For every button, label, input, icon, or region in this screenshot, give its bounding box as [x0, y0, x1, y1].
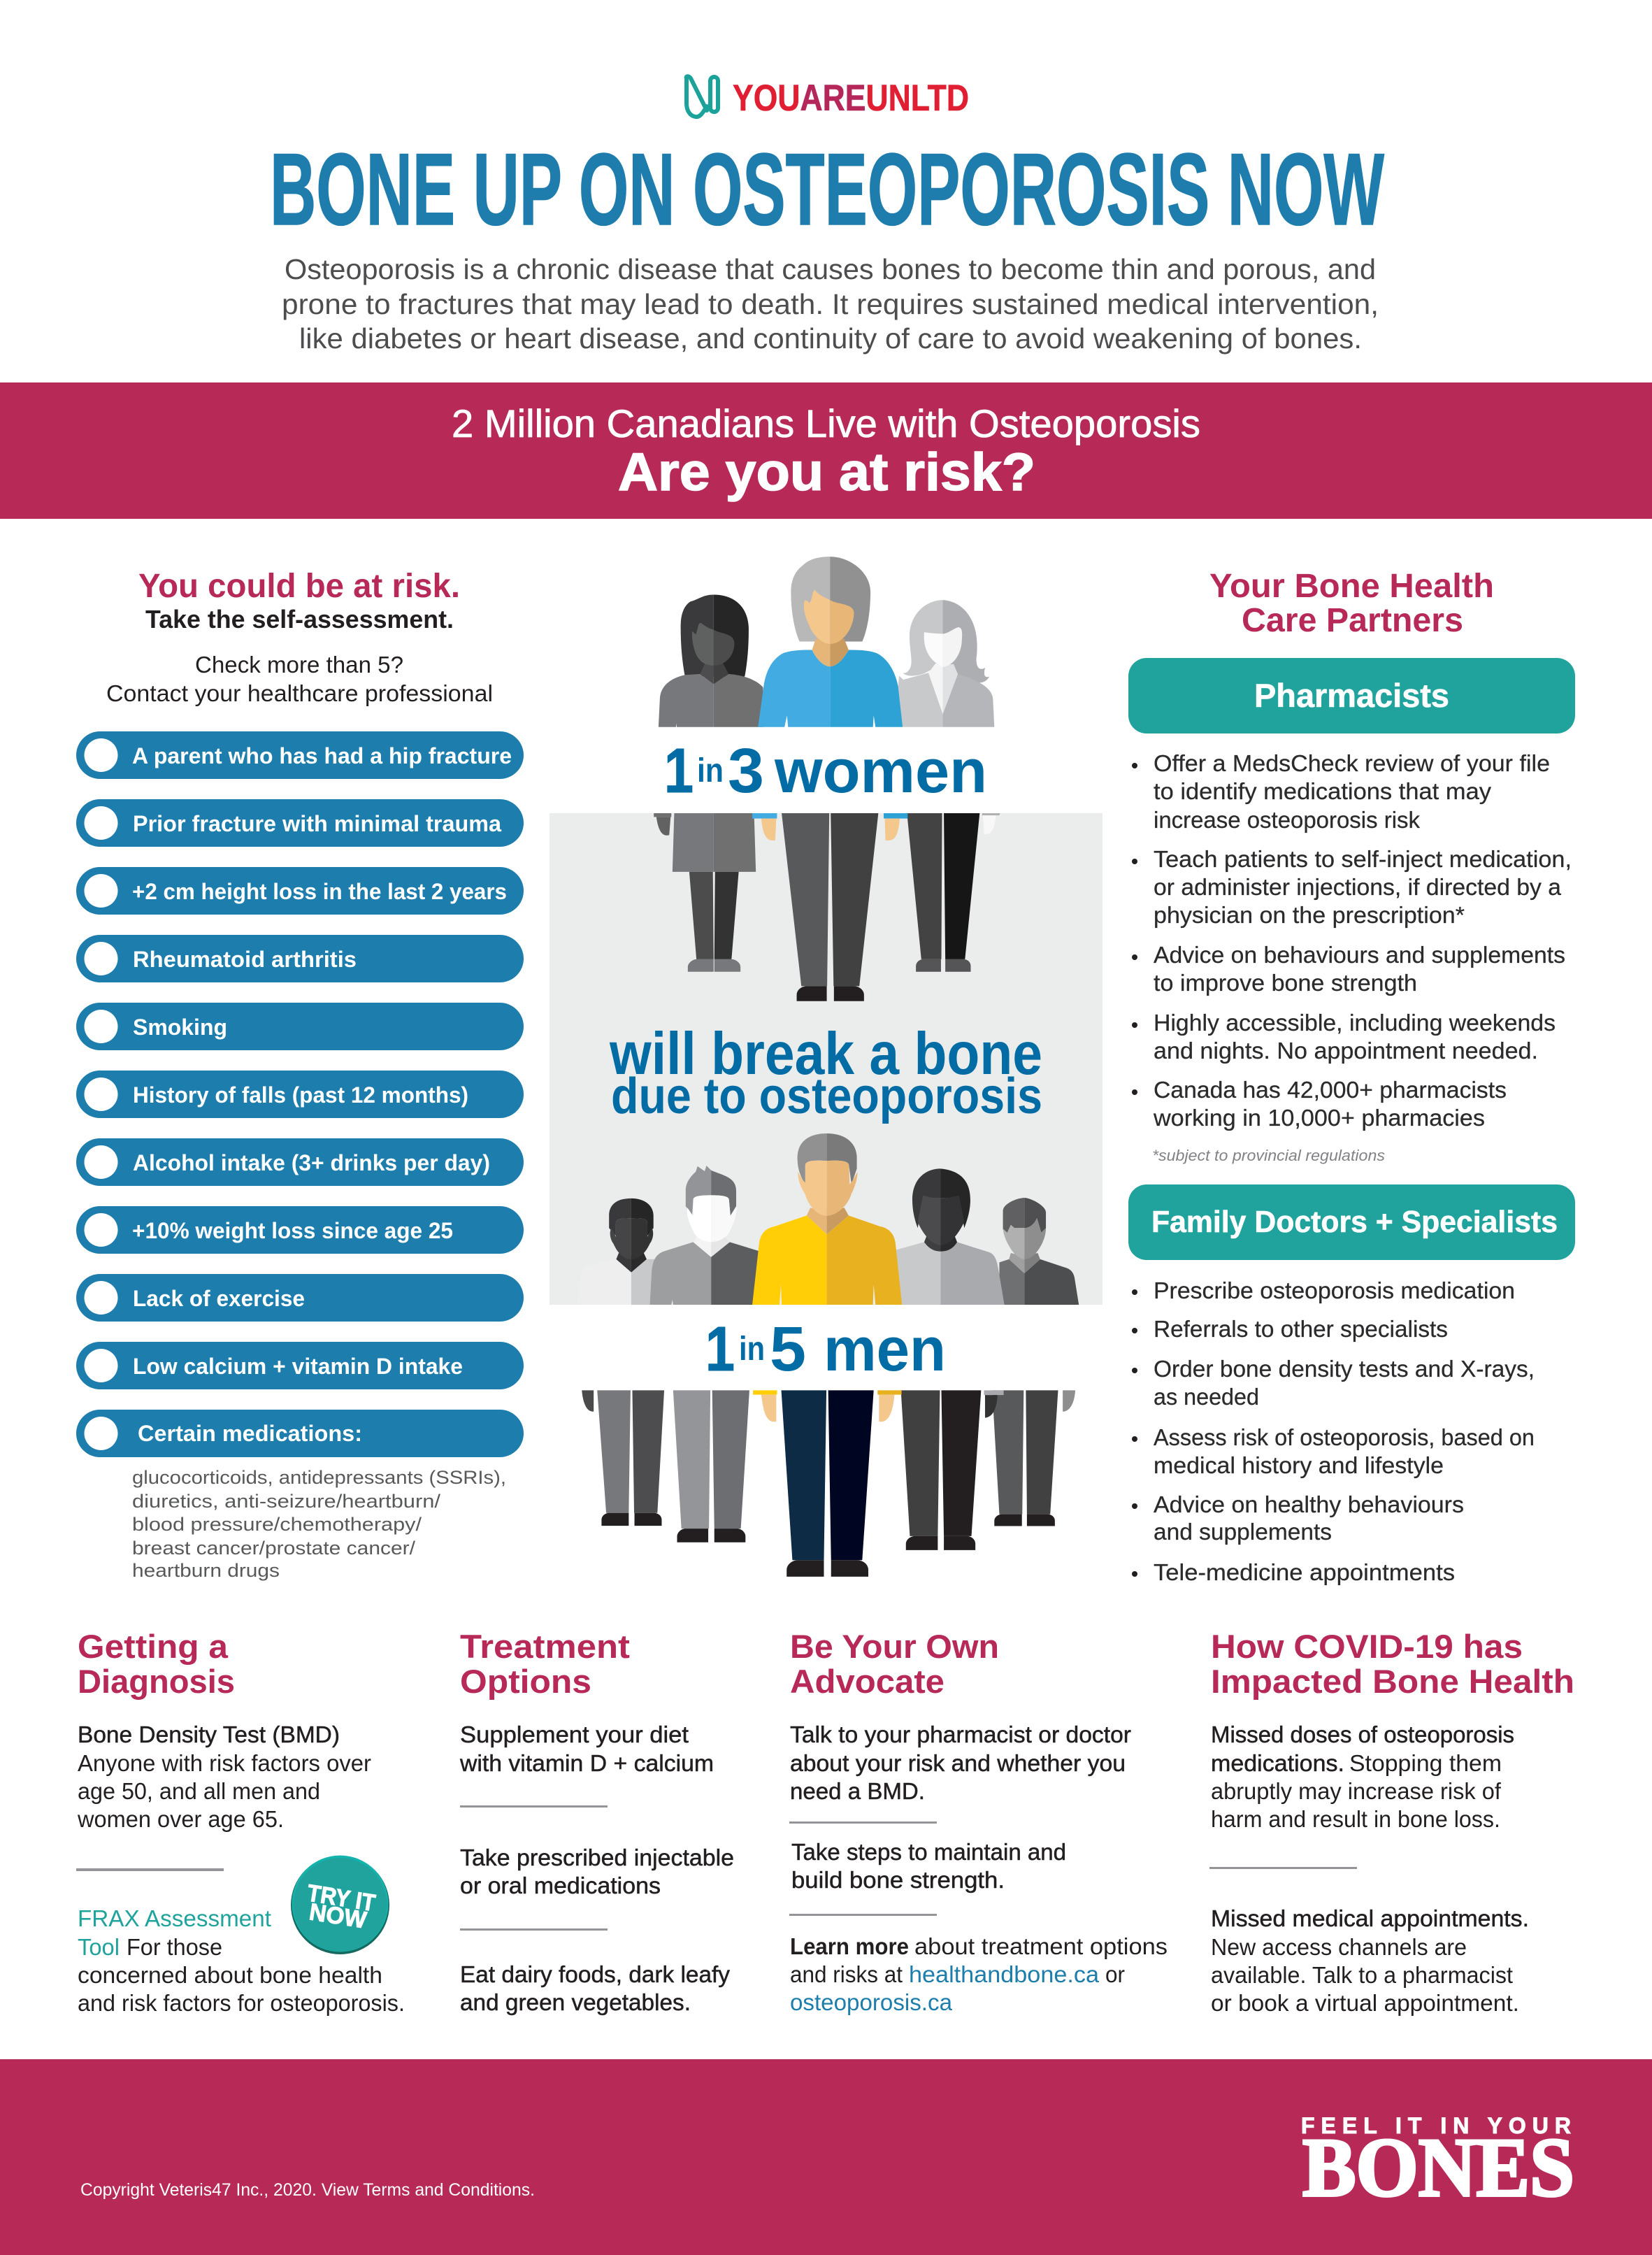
text: medications: Take prescribed injectable	[460, 1845, 734, 1870]
pill: medications	[76, 1410, 524, 1457]
figure: far-left man	[577, 1198, 664, 1526]
heading	[790, 1628, 999, 1700]
pill: rheumatoid arthritis: Rheumatoid arthritis	[133, 947, 357, 972]
list: family doctors: Tele-medicine appointments	[1154, 1559, 1455, 1585]
text: supplements: Supplement your diet	[460, 1721, 689, 1747]
text: take steps	[791, 1839, 1066, 1893]
text: missed doses: Missed doses of osteoporosis	[1211, 1721, 1514, 1747]
medications list: breast cancer/prostate cancer/	[132, 1538, 416, 1559]
list: pharmacists: Canada has 42,000+ pharmacists	[1154, 1077, 1507, 1103]
text: missed appointments	[1211, 1905, 1529, 2016]
text: take steps: build bone strength.	[791, 1867, 1005, 1893]
statistic: 1 in 3 women: 3	[728, 736, 764, 806]
heading: Be Your Own	[790, 1628, 999, 1665]
pill: calcium: Low calcium + vitamin D intake	[133, 1354, 463, 1379]
grey background panel	[550, 813, 1102, 1305]
statistic: 1 in 5 men: 1	[705, 1315, 735, 1384]
pill: exercise	[76, 1274, 524, 1322]
intro text	[282, 253, 1379, 355]
instruction text	[106, 652, 493, 706]
medications list: blood pressure/chemotherapy/	[132, 1514, 422, 1535]
list: pharmacists: to identify medications that may	[1154, 778, 1492, 804]
footnote: *subject to provincial regulations	[1152, 1147, 1385, 1164]
list: pharmacists: to improve bone strength	[1154, 970, 1417, 996]
statistic: 1 in 5 men: 5	[770, 1315, 806, 1384]
list: pharmacists	[1132, 750, 1572, 1131]
instruction text: Check more than 5?	[195, 652, 403, 678]
subheading: Take the self-assessment.	[145, 605, 454, 633]
text: missed appointments: or book a virtual appointment.	[1211, 1990, 1519, 2016]
panel: getting a diagnosis	[76, 1628, 405, 2016]
text: missed doses: harm and result in bone loss.	[1211, 1806, 1500, 1832]
pill: smoking	[76, 1003, 524, 1050]
footer band	[0, 2059, 1652, 2255]
figure: fourth man	[896, 1168, 1005, 1550]
text: medications	[460, 1845, 734, 1898]
text: supplements: with vitamin D + calcium	[459, 1750, 714, 1776]
text: missed doses: abruptly may increase risk of	[1211, 1778, 1502, 1804]
text: will break a bone: due to osteoporosis	[611, 1068, 1042, 1124]
heading	[460, 1628, 630, 1700]
statistic: 1 in 3 women: in	[697, 752, 724, 789]
list: family doctors: medical history and lifestyle	[1154, 1452, 1444, 1478]
list: pharmacists: physician on the prescription*	[1154, 902, 1465, 928]
text: supplements	[459, 1721, 714, 1776]
statistic: 1 in 5 men	[705, 1315, 946, 1384]
pill: hip fracture	[76, 731, 524, 779]
checklist pills	[76, 731, 524, 1457]
icon: try it now button: TRY IT	[306, 1880, 378, 1917]
list: pharmacists: working in 10,000+ pharmacies	[1153, 1105, 1485, 1131]
text: medications: or oral medications	[460, 1873, 661, 1898]
illustration: five men	[577, 1133, 1079, 1577]
list: pharmacists: increase osteoporosis risk	[1154, 807, 1420, 833]
heading: Advocate	[790, 1663, 944, 1700]
intro text: Osteoporosis is a chronic disease that causes bones to become thin and porous, and	[285, 253, 1376, 285]
text: learn more: and risks at	[790, 1961, 903, 1987]
banner heading: Are you at risk?	[618, 443, 1035, 502]
list: family doctors: Advice on healthy behaviours	[1154, 1491, 1464, 1517]
text: bone density test: Anyone with risk factors over	[78, 1750, 371, 1776]
header: family doctors and specialists: Family Doctors + Specialists	[1151, 1205, 1558, 1239]
text: bone density test	[77, 1721, 371, 1832]
text: will break a bone	[609, 1021, 1042, 1124]
medications list: diuretics, anti-seizure/heartburn/	[132, 1491, 441, 1512]
intro text: like diabetes or heart disease, and continuity of care to avoid weakening of bones.	[299, 322, 1362, 355]
text: FRAX tool: and risk factors for osteoporosis.	[78, 1990, 405, 2016]
panel: centre statistics	[550, 557, 1102, 1577]
text: learn more: osteoporosis.ca	[790, 1989, 953, 2015]
panel: self-assessment	[76, 568, 524, 1581]
intro text: prone to fractures that may lead to death. It requires sustained medical intervention,	[282, 288, 1379, 320]
icon: logo mark	[687, 76, 718, 117]
pill: hip fracture: A parent who has had a hip fracture	[132, 743, 512, 768]
text: diet	[460, 1961, 731, 2015]
text: will break a bone: will break a bone	[609, 1021, 1042, 1087]
text: bone density test: Bone Density Test (BMD)	[78, 1721, 340, 1747]
heading	[78, 1628, 235, 1700]
text: learn more: Learn more	[790, 1933, 909, 1959]
text: FRAX tool	[78, 1905, 405, 2016]
statistic: 1 in 3 women	[664, 736, 987, 806]
statistic: 1 in 3 women: women	[774, 736, 987, 806]
text: learn more: healthandbone.ca	[909, 1961, 1100, 1987]
panel: bone health care partners	[1128, 568, 1575, 1585]
pill: exercise: Lack of exercise	[133, 1286, 305, 1311]
list: family doctors	[1132, 1277, 1535, 1585]
pill: calcium	[76, 1342, 524, 1389]
list: family doctors: Referrals to other specialists	[1154, 1316, 1448, 1342]
text: missed appointments: Missed medical appointments.	[1211, 1905, 1529, 1931]
pill: alcohol: Alcohol intake (3+ drinks per day)	[133, 1150, 490, 1175]
figure: left woman	[654, 595, 763, 972]
pill: falls	[76, 1071, 524, 1118]
list: pharmacists: Teach patients to self-inject medication,	[1154, 846, 1572, 872]
text: learn more: or	[1105, 1961, 1125, 1987]
header: family doctors and specialists	[1128, 1184, 1575, 1260]
pill: medications: Certain medications:	[138, 1421, 362, 1446]
pill: falls: History of falls (past 12 months)	[133, 1082, 468, 1108]
pill: smoking: Smoking	[133, 1015, 227, 1040]
heading: Getting a	[78, 1628, 229, 1665]
logo: You Are Unltd	[687, 76, 969, 119]
statistic: 1 in 3 women: 1	[664, 736, 694, 806]
text: bone density test: women over age 65.	[77, 1806, 284, 1832]
text: FRAX tool: concerned about bone health	[78, 1962, 382, 1988]
header: pharmacists	[1128, 658, 1575, 733]
list: family doctors: and supplements	[1154, 1519, 1332, 1545]
pill: rheumatoid arthritis	[76, 935, 524, 982]
text: talk to pharmacist: about your risk and whether you	[790, 1750, 1126, 1776]
list: pharmacists: Advice on behaviours and supplements	[1154, 942, 1565, 968]
pill: prior fracture	[76, 799, 524, 847]
heading: Options	[460, 1663, 591, 1700]
icon: try it now button: NOW	[308, 1898, 369, 1934]
text: take steps: Take steps to maintain and	[791, 1839, 1066, 1865]
text: diet: and green vegetables.	[460, 1989, 691, 2015]
copyright text: Copyright Veteris47 Inc., 2020. View Terms and Conditions.	[80, 2180, 535, 2200]
banner subtitle: 2 Million Canadians Live with Osteoporosis	[452, 401, 1200, 445]
banner: are you at risk	[0, 382, 1652, 519]
pill: weight loss	[76, 1206, 524, 1254]
text: talk to pharmacist	[790, 1721, 1131, 1804]
pill: prior fracture: Prior fracture with minimal trauma	[133, 811, 501, 836]
text: missed appointments: available. Talk to a pharmacist	[1211, 1962, 1513, 1988]
logo: feel it in your bones: BONES	[1302, 2121, 1574, 2214]
logo wordmark: YOUAREUNLTD	[733, 78, 969, 119]
text: missed doses: medications.	[1211, 1750, 1344, 1776]
figure: right woman	[898, 600, 1000, 972]
heading: Impacted Bone Health	[1211, 1663, 1574, 1700]
figure: centre woman in blue	[752, 557, 907, 1001]
panel: treatment options	[459, 1628, 734, 2015]
heading: care partners: Care Partners	[1242, 602, 1463, 639]
list: pharmacists: or administer injections, if directed by a	[1154, 874, 1562, 900]
text: talk to pharmacist: Talk to your pharmacist or doctor	[790, 1721, 1131, 1747]
heading	[1211, 1628, 1574, 1700]
figure: far-right man	[992, 1198, 1079, 1526]
list: family doctors: Order bone density tests and X-rays,	[1154, 1356, 1535, 1382]
pill: height loss: +2 cm height loss in the last 2 years	[132, 879, 507, 904]
heading: Diagnosis	[78, 1663, 235, 1700]
text: diet: Eat dairy foods, dark leafy	[460, 1961, 731, 1987]
pill: weight loss: +10% weight loss since age 25	[132, 1218, 453, 1243]
list: family doctors: Assess risk of osteoporosis, based on	[1154, 1424, 1535, 1450]
heading: care partners	[1209, 568, 1494, 639]
text: learn more	[790, 1933, 1168, 2015]
medications list: glucocorticoids, antidepressants (SSRIs),	[132, 1467, 506, 1488]
list: family doctors: Prescribe osteoporosis medication	[1154, 1277, 1515, 1303]
heading: How COVID-19 has	[1211, 1628, 1523, 1665]
text: missed appointments: New access channels are	[1211, 1934, 1467, 1960]
heading: care partners: Your Bone Health	[1209, 568, 1494, 605]
logo: feel it in your bones: FEEL IT IN YOUR	[1301, 2113, 1571, 2138]
icon: try it now button	[291, 1856, 389, 1954]
list: family doctors: as needed	[1154, 1384, 1259, 1410]
list: pharmacists: Highly accessible, including weekends	[1154, 1010, 1556, 1036]
text: FRAX tool: Tool	[78, 1934, 120, 1960]
text: FRAX tool: FRAX Assessment	[78, 1905, 271, 1931]
text: missed doses	[1211, 1721, 1514, 1832]
text: talk to pharmacist: need a BMD.	[790, 1778, 925, 1804]
panel: COVID-19 impact	[1209, 1628, 1574, 2016]
figure: second man	[650, 1166, 760, 1542]
figure: centre man in yellow	[752, 1133, 902, 1577]
text: bone density test: age 50, and all men and	[78, 1778, 320, 1804]
list: pharmacists: and nights. No appointment needed.	[1154, 1038, 1538, 1064]
text: missed doses: Stopping them	[1349, 1750, 1502, 1776]
pill: alcohol	[76, 1138, 524, 1186]
illustration: three women	[654, 557, 1000, 1001]
pill: height loss	[76, 867, 524, 915]
heading: Treatment	[460, 1628, 630, 1665]
text: FRAX tool: For those	[127, 1934, 222, 1960]
statistic: 1 in 5 men: men	[824, 1315, 946, 1384]
statistic: 1 in 5 men: in	[739, 1331, 765, 1368]
medications list	[132, 1467, 506, 1581]
text: learn more: about treatment options	[914, 1933, 1168, 1959]
header: pharmacists: Pharmacists	[1254, 677, 1449, 714]
medications list: heartburn drugs	[132, 1560, 280, 1581]
list: pharmacists: Offer a MedsCheck review of your file	[1154, 750, 1550, 776]
heading: you could be at risk: You could be at risk.	[138, 568, 460, 605]
panel: be your own advocate	[789, 1628, 1168, 2015]
instruction text: Contact your healthcare professional	[106, 680, 493, 706]
